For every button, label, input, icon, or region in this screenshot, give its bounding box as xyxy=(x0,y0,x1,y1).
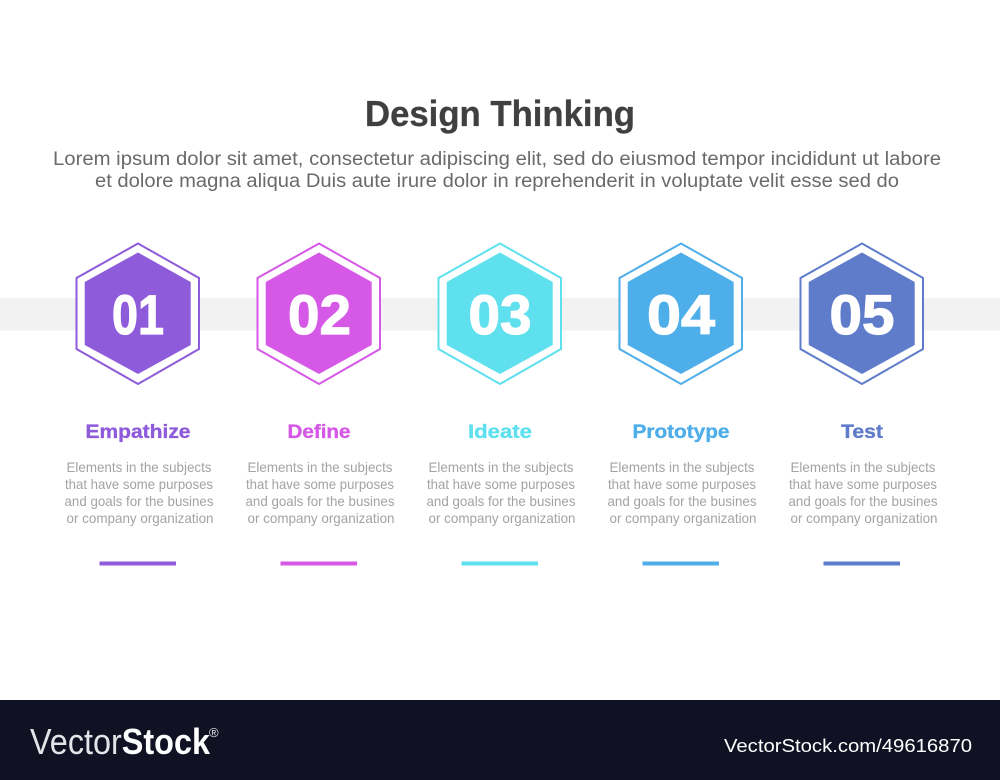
hexagon 04 xyxy=(620,244,742,384)
footer id: VectorStock.com/49616870 xyxy=(724,736,972,756)
description 4: that have some purposes xyxy=(608,476,756,492)
timeline band xyxy=(0,298,1000,330)
hexagon 05: 05 xyxy=(830,283,894,346)
accent line 3 xyxy=(462,562,538,566)
description 5: and goals for the busines xyxy=(788,493,938,509)
description 5 xyxy=(788,459,938,526)
heading: Define: Define xyxy=(288,422,350,443)
description 4: Elements in the subjects xyxy=(610,459,754,475)
hexagon 02: 02 xyxy=(288,283,351,346)
step 4: Prototype xyxy=(608,244,756,566)
description 2: and goals for the busines xyxy=(246,493,394,509)
accent line 4 xyxy=(642,562,719,566)
accent line 2 xyxy=(280,562,357,566)
hexagon 01 xyxy=(76,244,199,384)
description 4: or company organization xyxy=(610,510,756,526)
registered mark: ® xyxy=(209,725,219,740)
title: Design Thinking xyxy=(365,93,635,134)
subtitle xyxy=(53,149,941,192)
description 2: Elements in the subjects xyxy=(248,459,392,475)
accent line 1 xyxy=(100,562,176,566)
footer logo: VectorStock xyxy=(30,721,211,762)
step 5: Test xyxy=(788,244,938,566)
description 1: or company organization xyxy=(66,510,214,526)
description 3: that have some purposes xyxy=(427,476,575,492)
description 5: or company organization xyxy=(790,510,938,526)
hexagon 02 xyxy=(258,244,380,384)
description 5: that have some purposes xyxy=(789,476,937,492)
step 3: Ideate xyxy=(426,244,576,566)
description 5: Elements in the subjects xyxy=(790,459,936,475)
description 4: and goals for the busines xyxy=(608,493,756,509)
hexagon 04: 04 xyxy=(647,283,715,346)
hexagon 01: 01 xyxy=(112,283,164,346)
description 2: that have some purposes xyxy=(246,476,394,492)
description 1: and goals for the busines xyxy=(64,493,214,509)
hexagon 03: 03 xyxy=(468,283,532,346)
description 3: and goals for the busines xyxy=(426,493,576,509)
description 4 xyxy=(608,459,756,526)
step 1: Empathize xyxy=(64,244,214,566)
description 1 xyxy=(64,459,214,526)
description 2: or company organization xyxy=(248,510,394,526)
footer bar xyxy=(0,700,1000,780)
description 3: Elements in the subjects xyxy=(428,459,574,475)
description 2 xyxy=(246,459,394,526)
heading: Ideate: Ideate xyxy=(468,422,532,443)
accent line 5 xyxy=(824,562,900,566)
hexagon 05 xyxy=(800,244,923,384)
heading: Test: Test xyxy=(841,422,884,443)
heading: Prototype: Prototype xyxy=(632,422,730,443)
description 1: that have some purposes xyxy=(65,476,213,492)
subtitle: Lorem ipsum dolor sit amet, consectetur adipiscing elit, sed do eiusmod tempor incididunt ut labore xyxy=(53,149,941,170)
description 3: or company organization xyxy=(428,510,576,526)
hexagon 03 xyxy=(438,244,561,384)
heading: Empathize: Empathize xyxy=(86,422,190,443)
description 1: Elements in the subjects xyxy=(66,459,212,475)
subtitle: et dolore magna aliqua Duis aute irure dolor in reprehenderit in voluptate velit esse sed do xyxy=(95,171,899,192)
description 3 xyxy=(426,459,576,526)
step 2: Define xyxy=(246,244,394,566)
